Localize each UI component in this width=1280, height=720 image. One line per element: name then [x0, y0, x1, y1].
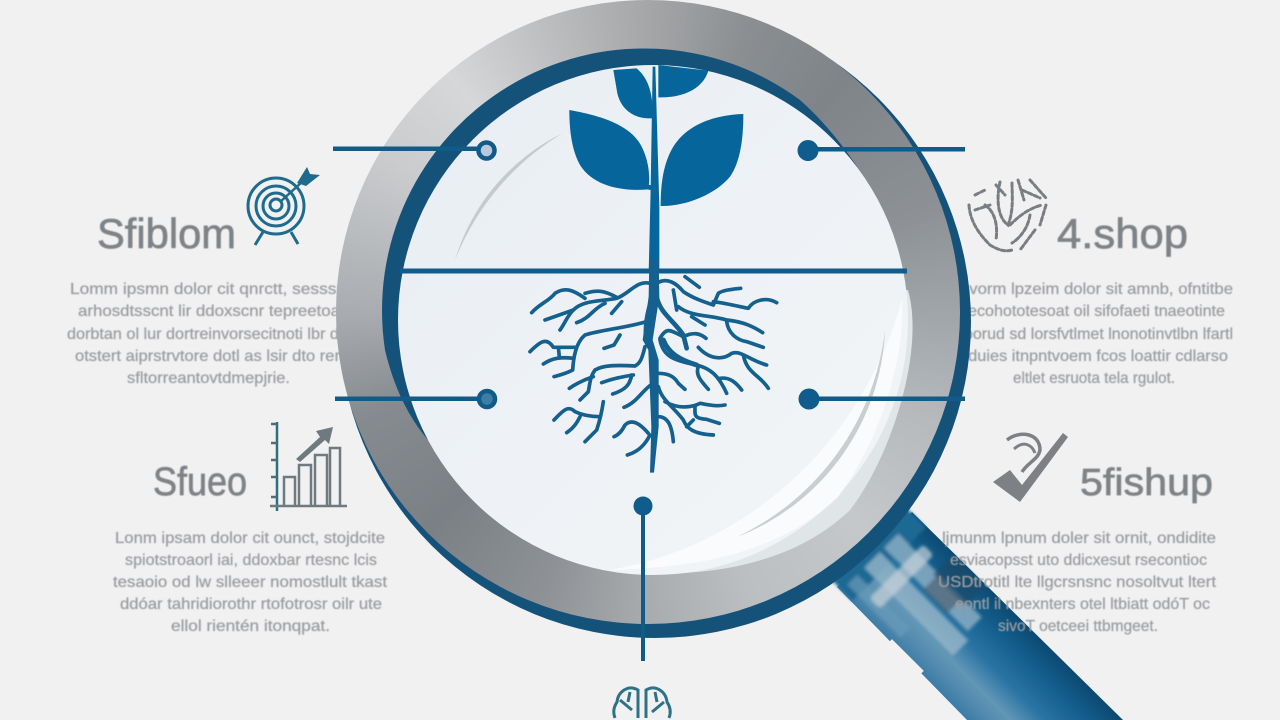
text block: lower right: eontl il nbexnters otel ltbiatt odóT oc — [955, 596, 1210, 613]
heading: lower left: Sfueo — [153, 460, 247, 504]
text block: lower right: sivoT oetceei ttbmgeet. — [998, 618, 1158, 635]
text block: upper right: Lvorm lpzeim dolor sit amnb, ofntitbe — [960, 281, 1233, 298]
soil horizon line — [400, 268, 907, 274]
text block: lower right: USDtrotitl lte llgcrsnsnc nosoltvut ltert — [938, 574, 1217, 591]
connector bottom left — [335, 391, 495, 407]
magnifier lens — [382, 48, 913, 575]
icon: dotted brain tree — [969, 180, 1046, 251]
heading: lower right: 5fishup — [1080, 462, 1213, 504]
icon: check mark with hand — [993, 433, 1068, 502]
text block: upper left: sfltorreantovtdmepjrie. — [127, 370, 290, 387]
text block: upper left: Lomm ipsmn dolor cit qnrctt, sesssu — [70, 281, 346, 298]
magnifier grey rim — [336, 0, 960, 624]
plant leaves and stem — [569, 65, 743, 273]
text block: upper left: dorbtan ol lur dortreinvorsecitnoti lbr dc — [67, 326, 347, 343]
magnifier handle — [821, 499, 1123, 720]
text block: lower right: ljmunm lpnum doler sit ornit, ondidite — [942, 530, 1216, 547]
text block: lower left: ellol rientén itonqpat. — [171, 618, 330, 635]
text block: upper left: otstert aiprstrvtore dotl as lsir dto rer — [75, 348, 341, 365]
text block: lower right: esviacopsst uto ddicxesut rsecontioc — [950, 552, 1207, 569]
icon: brain at bottom — [614, 688, 670, 718]
connector bottom centre — [634, 496, 652, 661]
icon: target with arrow — [248, 167, 320, 245]
text block: lower left: spiotstroaorl iai, ddoxbar rtesnc lcis — [125, 552, 377, 569]
text block: upper right: eltlet esruota tela rgulot. — [1013, 370, 1175, 387]
icon: growth chart — [270, 422, 347, 511]
text block: upper left: arhosdtsscnt lir ddoxscnr tepreetoa — [78, 303, 340, 320]
text block: lower left: Lonm ipsam dolor cit ounct, stojdcite — [115, 530, 385, 547]
connector top right — [798, 140, 965, 161]
text block: upper right: ecohototesoat oil sifofaeti tnaeotinte — [968, 303, 1225, 320]
heading: upper right: 4.shop — [1057, 210, 1188, 257]
plant roots — [530, 260, 777, 473]
magnifier outer rim shadow — [339, 6, 971, 638]
text block: lower left: tesaoio od lw slleeer nomostlult tkast — [113, 574, 388, 591]
heading: upper left: Sfiblom — [97, 210, 236, 257]
text block: upper right — [955, 281, 1233, 387]
connector top left — [333, 142, 494, 158]
text block: upper right: aborud sd lorsfvtlmet lnonotinvtlbn lfartl — [955, 326, 1233, 343]
text block: upper right: sduies itnpntvoem fcos loattir cdlarso — [960, 348, 1228, 365]
text block: lower right — [938, 530, 1217, 635]
text block: upper left — [67, 281, 347, 387]
text block: lower left — [113, 530, 388, 635]
connector bottom right — [798, 388, 965, 410]
text block: lower left: ddóar tahridiorothr rtofotrosr oilr ute — [120, 596, 382, 613]
